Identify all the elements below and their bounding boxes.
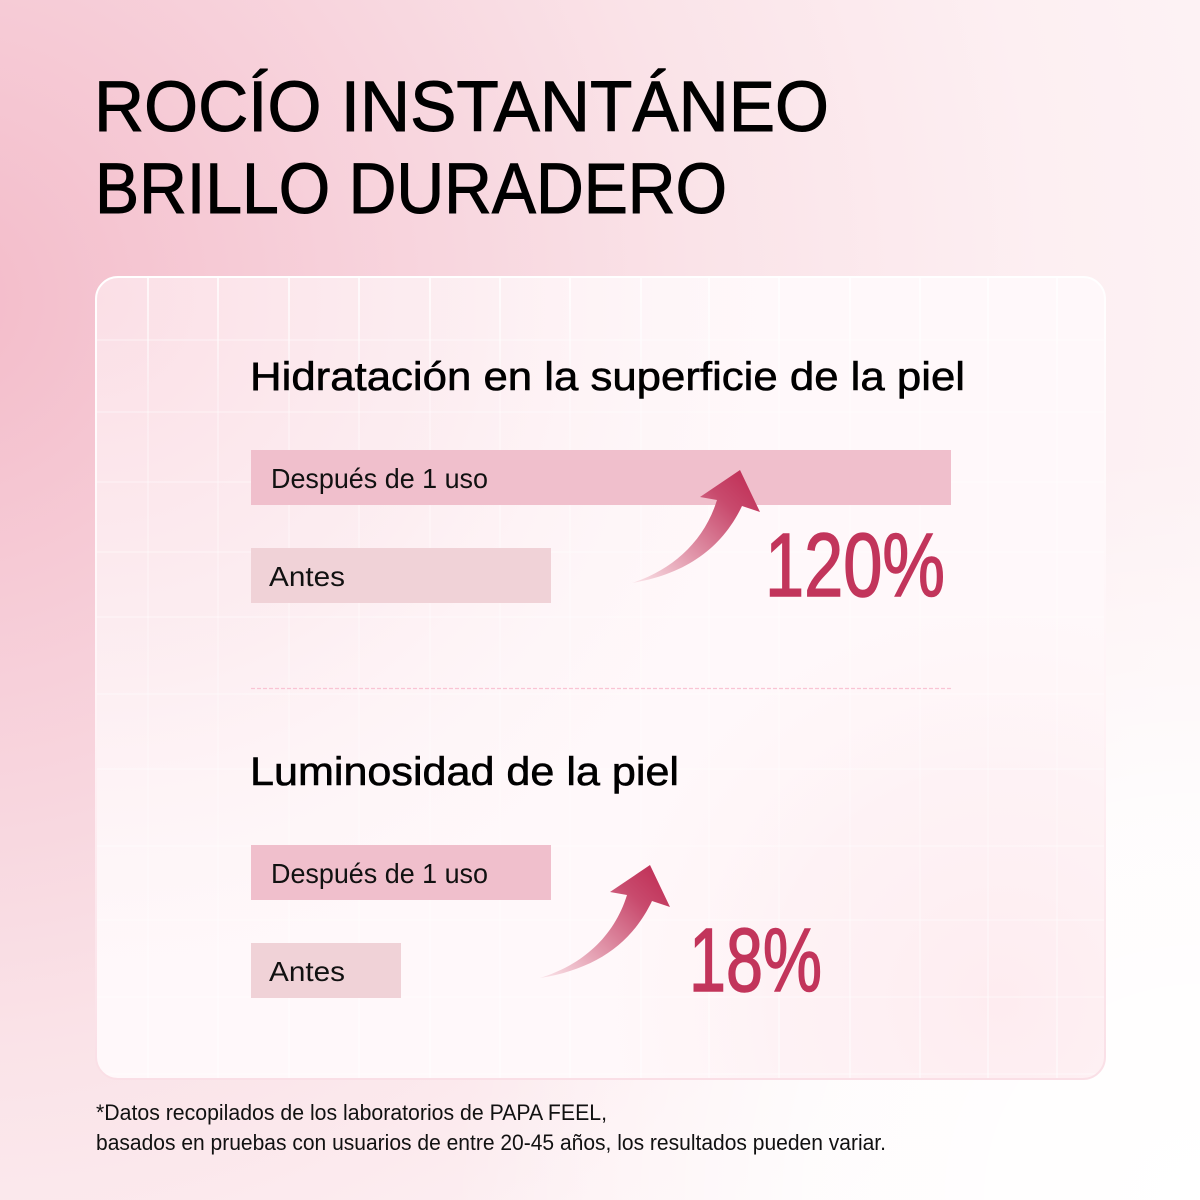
footnote: basados en pruebas con usuarios de entre 20-45 años, los resultados pueden variar.	[96, 1130, 886, 1155]
bar: hydration after: Después de 1 uso	[271, 463, 488, 494]
divider	[251, 688, 952, 690]
panel: results card	[96, 277, 1105, 1079]
arrow: luminosity increase	[540, 865, 670, 978]
footnote: *Datos recopilados de los laboratorios de PAPA FEEL,	[96, 1100, 607, 1125]
title: ROCÍO INSTANTÁNEO	[94, 68, 829, 147]
bar: hydration after	[251, 450, 951, 505]
heading: luminosity: Luminosidad de la piel	[250, 750, 679, 794]
heading: hydration: Hidratación en la superficie de la piel	[250, 355, 965, 399]
title: BRILLO DURADERO	[95, 150, 727, 229]
bar: luminosity before: Antes	[269, 956, 345, 987]
bar: hydration before	[251, 548, 551, 603]
bar: luminosity after	[251, 845, 551, 900]
bar: luminosity after: Después de 1 uso	[271, 858, 488, 889]
bar: luminosity before	[251, 943, 401, 998]
value: 120%: 120%	[765, 516, 945, 616]
footnote	[96, 1100, 886, 1155]
title	[94, 68, 829, 229]
value: 18%: 18%	[689, 911, 822, 1011]
arrow: hydration increase	[632, 470, 760, 583]
bar: hydration before: Antes	[269, 561, 345, 592]
